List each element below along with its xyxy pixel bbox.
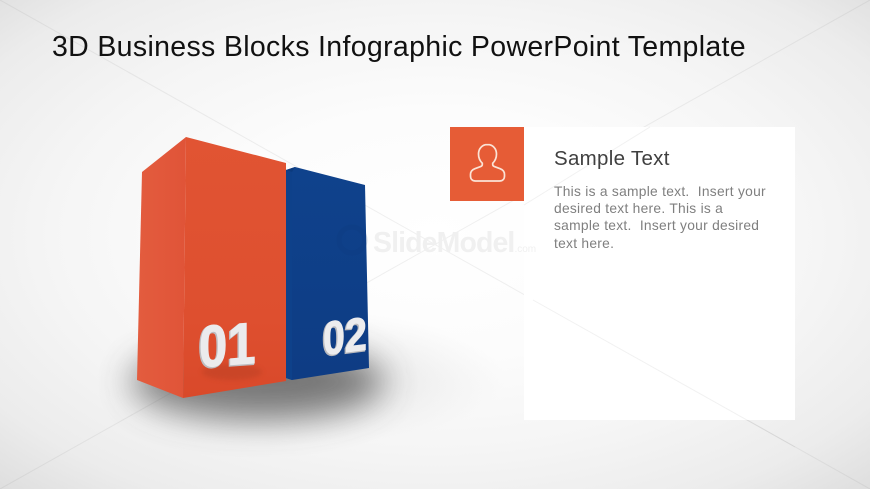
text panel background [524, 127, 795, 420]
icon tile: person [450, 127, 524, 201]
block shadow [95, 310, 505, 446]
panel body text: desired text here. This is a [554, 201, 723, 216]
block 01 red [137, 137, 286, 398]
panel body text: sample text. Insert your desired [554, 218, 759, 233]
panel body text [554, 184, 766, 251]
number 02: 02 [322, 310, 366, 367]
panel body text: This is a sample text. Insert your [554, 184, 766, 198]
number 01: 01 [199, 310, 256, 380]
block 02 blue [286, 167, 369, 380]
number 01: 01 [198, 311, 255, 381]
number 02: 02 [323, 309, 367, 366]
watermark: SlideModel.com [373, 227, 536, 259]
panel body text: text here. [554, 236, 614, 251]
number shadow [202, 364, 262, 380]
panel heading: Sample Text [554, 147, 670, 170]
title: 3D Business Blocks Infographic PowerPoint Template [52, 31, 746, 63]
